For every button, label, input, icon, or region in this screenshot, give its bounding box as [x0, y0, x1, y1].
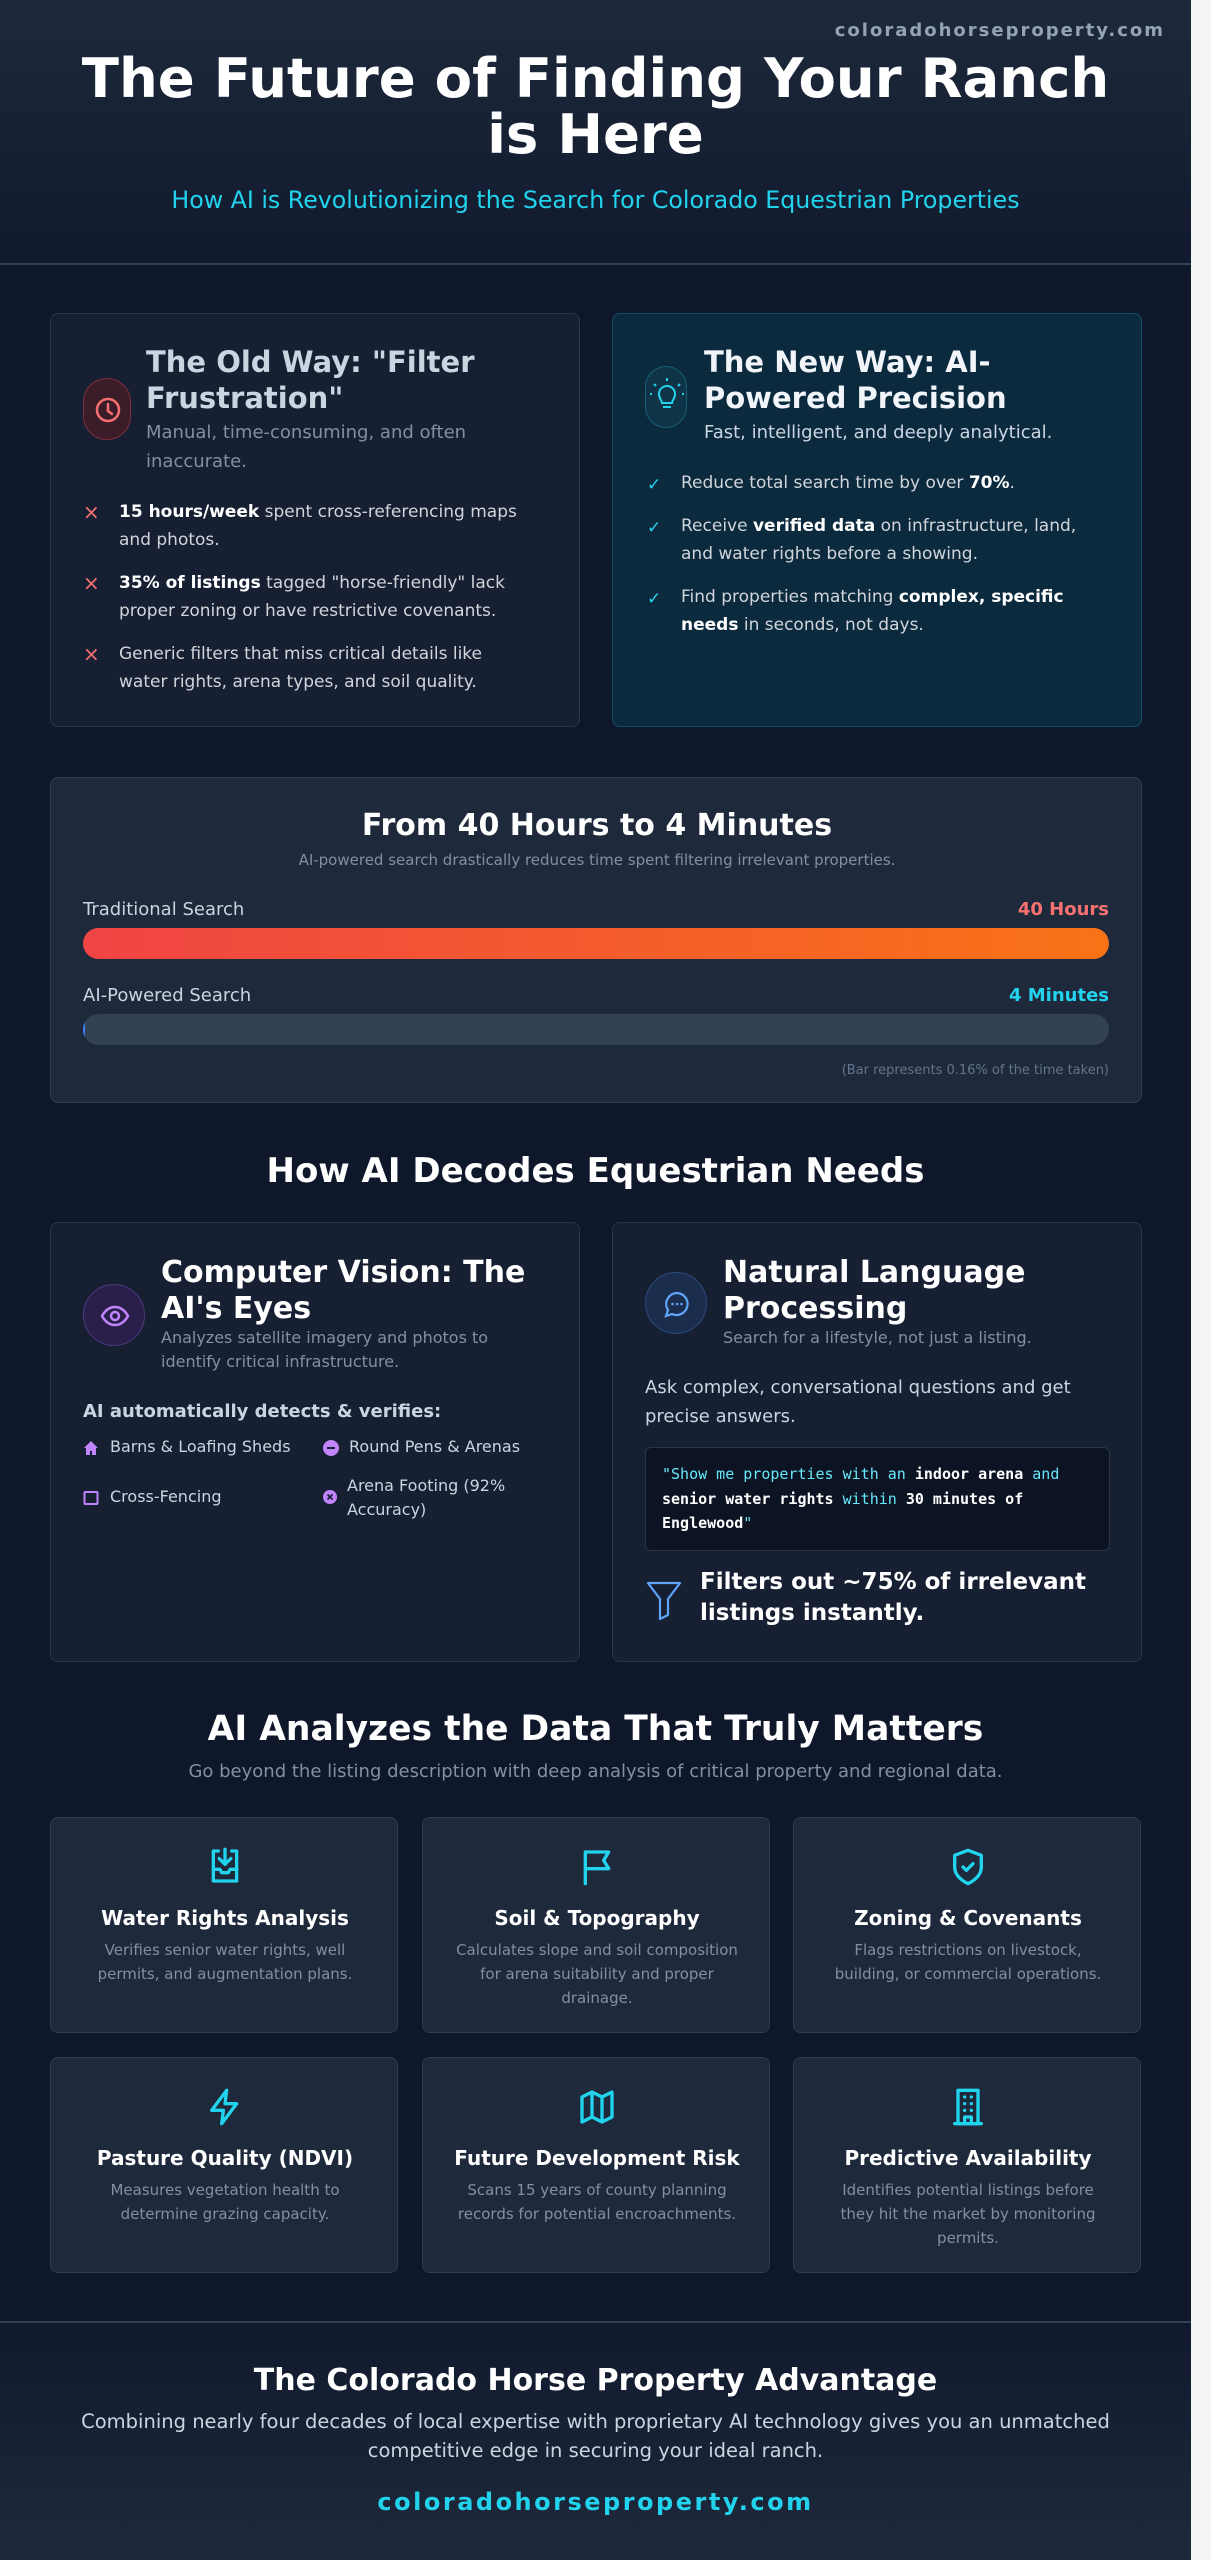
bar chart: (Bar represents 0.16% of the time taken): [842, 1063, 1109, 1078]
panel: pasture: Pasture Quality (NDVI): [97, 2146, 353, 2170]
panel: soil: Calculates slope and soil composition for arena suitability and proper drainage.: [456, 1941, 738, 2007]
bullet list: ×: [83, 500, 100, 524]
icon: eye: [83, 1284, 145, 1346]
panel: soil: Soil & Topography: [494, 1906, 700, 1930]
icon: shield: [953, 1848, 983, 1886]
panel: pasture: [50, 2057, 398, 2273]
panel: zoning: [793, 1817, 1141, 2033]
check list: [647, 473, 1076, 635]
check list: Receive verified data on infrastructure, land, and water rights before a showing.: [681, 516, 1076, 564]
icon: clock: [83, 378, 131, 440]
heading: Computer Vision: The AI's Eyes: [161, 1255, 525, 1326]
panel: water rights: Verifies senior water rights, well permits, and augmentation plans.: [98, 1941, 352, 1983]
heading: Natural Language Processing: [723, 1255, 1025, 1326]
panel: development risk: [422, 2057, 770, 2273]
detection list: Cross-Fencing: [110, 1487, 221, 1506]
detection list: [84, 1437, 520, 1519]
panel: computer vision: [50, 1222, 580, 1662]
bar chart: AI-Powered Search: [83, 985, 251, 1006]
icon: flag: [584, 1850, 610, 1886]
subheading: Search for a lifestyle, not just a listing.: [723, 1328, 1032, 1347]
site url: coloradohorseproperty.com: [835, 20, 1165, 41]
icon: bolt: [210, 2088, 238, 2126]
panel: development risk: Scans 15 years of county planning records for potential encroachments.: [458, 2181, 736, 2223]
title: [82, 46, 1109, 166]
bullet list: ×: [83, 642, 100, 666]
footer heading: The Colorado Horse Property Advantage: [254, 2363, 937, 2398]
query box: [645, 1447, 1110, 1551]
panel: soil: [422, 1817, 770, 2033]
heading: The New Way: AI-Powered Precision: [704, 345, 1007, 415]
icon: chat: [645, 1272, 707, 1334]
subtitle: How AI is Revolutionizing the Search for Colorado Equestrian Properties: [171, 186, 1020, 214]
panel: predictive: Predictive Availability: [844, 2146, 1092, 2170]
panel: predictive: Identifies potential listings before they hit the market by monitoring permits.: [840, 2181, 1096, 2247]
footer: [0, 2321, 1191, 2560]
icon: lightbulb: [645, 366, 687, 428]
check list: ✓: [647, 518, 661, 538]
panel: pasture: Measures vegetation health to determine grazing capacity.: [110, 2181, 340, 2223]
subheading: Manual, time-consuming, and often inaccurate.: [146, 422, 466, 472]
heading: The Old Way: "Filter Frustration": [146, 345, 475, 415]
bar chart: 4 Minutes: [1009, 985, 1109, 1006]
bar chart: 40 Hours: [1018, 899, 1109, 920]
subheading: Go beyond the listing description with deep analysis of critical property and regional data.: [188, 1761, 1003, 1782]
check list: Reduce total search time by over 70%.: [681, 473, 1015, 493]
heading: how AI decodes: How AI Decodes Equestrian Needs: [266, 1151, 924, 1191]
panel: development risk: Future Development Risk: [454, 2146, 740, 2170]
icon: funnel: [646, 1582, 682, 1620]
footer url: coloradohorseproperty.com: [377, 2488, 814, 2516]
callout: filter: Filters out ~75% of irrelevant listings instantly.: [700, 1569, 1086, 1626]
title: is Here: [487, 102, 704, 166]
subheading: AI-powered search drastically reduces time spent filtering irrelevant properties.: [299, 851, 895, 869]
panel: water rights: [50, 1817, 398, 2033]
detects heading: AI automatically detects & verifies:: [83, 1401, 441, 1422]
bullet list: Generic filters that miss critical details like water rights, arena types, and soil quality.: [119, 644, 482, 692]
panel: zoning: Zoning & Covenants: [854, 1906, 1082, 1930]
icon: download tray: [212, 1848, 238, 1883]
panel: time comparison: [50, 777, 1142, 1103]
subheading: Analyzes satellite imagery and photos to identify critical infrastructure.: [161, 1328, 488, 1371]
detection list: Arena Footing (92% Accuracy): [347, 1476, 505, 1519]
check list: ✓: [647, 475, 661, 495]
body text: Ask complex, conversational questions and get precise answers.: [645, 1377, 1071, 1427]
subheading: Fast, intelligent, and deeply analytical.: [704, 422, 1052, 443]
query box: "Show me properties with an indoor arena and senior water rights within 30 minutes of Englewood": [662, 1465, 1059, 1532]
heading: From 40 Hours to 4 Minutes: [362, 808, 832, 843]
title: The Future of Finding Your Ranch: [82, 46, 1109, 110]
footer text: Combining nearly four decades of local expertise with proprietary AI technology gives you an unmatched competitive edge in securing your ideal ranch.: [81, 2410, 1110, 2462]
panel: old way: [50, 313, 580, 727]
panel: predictive: [793, 2057, 1141, 2273]
panel: new way: [612, 313, 1142, 727]
header: [0, 0, 1191, 265]
bullet list: ×: [83, 571, 100, 595]
detection list: Round Pens & Arenas: [349, 1437, 520, 1456]
bar chart: [82, 899, 1109, 1078]
bullet list: [83, 500, 517, 692]
panel: NLP: [612, 1222, 1142, 1662]
bullet list: 15 hours/week spent cross-referencing maps and photos.: [119, 502, 517, 550]
icon: building: [953, 2088, 983, 2126]
bar chart: Traditional Search: [83, 899, 244, 920]
bullet list: 35% of listings tagged "horse-friendly" lack proper zoning or have restrictive covenants.: [119, 573, 505, 621]
panel: water rights: Water Rights Analysis: [101, 1906, 349, 1930]
icon: map: [580, 2090, 614, 2124]
heading: data that matters: AI Analyzes the Data That Truly Matters: [208, 1709, 983, 1749]
check list: ✓: [647, 589, 661, 609]
check list: Find properties matching complex, specific needs in seconds, not days.: [681, 587, 1064, 635]
panel: zoning: Flags restrictions on livestock, building, or commercial operations.: [835, 1941, 1101, 1983]
detection list: Barns & Loafing Sheds: [110, 1437, 291, 1456]
